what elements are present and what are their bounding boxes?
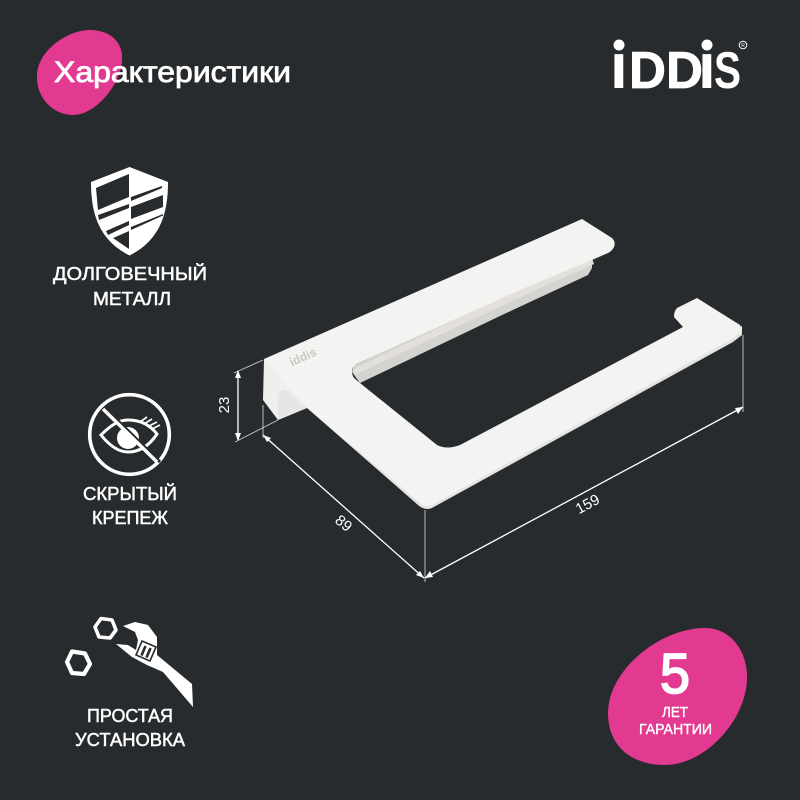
top face: [264, 219, 742, 506]
label: easy installation: [75, 705, 186, 750]
inner wall highlight: [352, 258, 594, 374]
logo: iDDiS: D: [666, 42, 703, 100]
label: hidden mount: СКРЫТЫЙ: [83, 483, 177, 504]
icon: nuts and wrench: [67, 618, 193, 707]
dimension: width 89: 89: [332, 512, 355, 535]
dimension: length 159: [425, 335, 743, 578]
label: durable metal: [53, 263, 207, 309]
icon: crossed-out eye: [90, 395, 169, 474]
title with pink blob: Характеристики: [54, 56, 291, 89]
feature: easy installation: [67, 618, 193, 750]
feature: durable metal: [53, 167, 207, 309]
label: easy installation: ПРОСТАЯ: [87, 705, 173, 726]
dimension: height 23: [216, 360, 278, 442]
lower rim: [307, 326, 742, 509]
product: towel holder: [263, 219, 742, 509]
front bracket: [263, 359, 330, 420]
title with pink blob: [37, 30, 291, 115]
dimension: length 159: 159: [573, 491, 603, 518]
dimension: width 89: [263, 405, 425, 582]
warranty badge: 5: [660, 642, 690, 706]
inner wall of upper arm: [352, 258, 592, 383]
icon: shield: [91, 167, 168, 256]
engraved logo: iddis: [287, 345, 319, 369]
warranty badge: ГАРАНТИИ: [639, 721, 712, 738]
logo: iDDiS: R: [741, 43, 745, 49]
logo: iDDiS: D: [629, 42, 666, 100]
feature: hidden mount: [83, 395, 177, 528]
dimension: height 23: 23: [216, 397, 233, 413]
label: durable metal: ДОЛГОВЕЧНЫЙ: [53, 263, 207, 284]
logo: iDDiS: [610, 30, 747, 102]
warranty badge: [608, 628, 747, 765]
label: hidden mount: [83, 483, 177, 528]
logo: iDDiS: i: [610, 30, 628, 102]
label: easy installation: УСТАНОВКА: [75, 729, 186, 750]
label: durable metal: МЕТАЛЛ: [93, 288, 171, 309]
bracket arch: [278, 390, 307, 420]
logo: iDDiS: S: [714, 42, 741, 100]
logo: iDDiS: i: [698, 30, 716, 102]
label: hidden mount: КРЕПЕЖ: [92, 507, 168, 528]
warranty badge: ЛЕТ: [662, 704, 688, 721]
